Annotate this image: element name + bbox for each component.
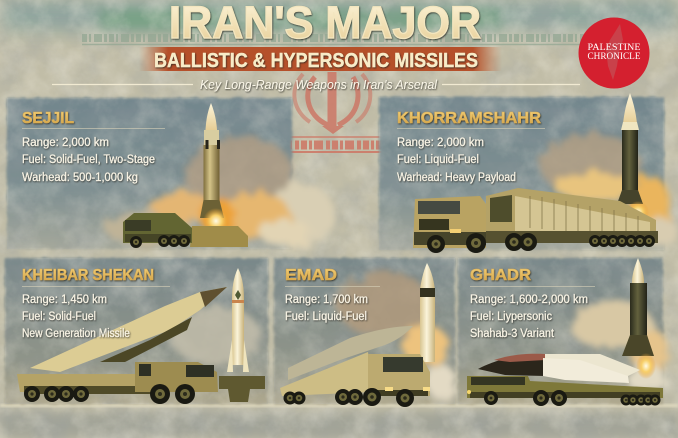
heading: EMAD xyxy=(285,267,337,284)
specs: Range: 2,000 km xyxy=(22,137,109,149)
specs: Fuel: Solid-Fuel xyxy=(22,311,96,323)
specs xyxy=(285,294,368,323)
panel: Khorramshahr xyxy=(379,93,678,253)
launcher truck xyxy=(413,188,658,253)
panel: Emad xyxy=(274,258,456,407)
logo: Palestine Chronicle: PALESTINE xyxy=(588,43,641,53)
specs: Range: 2,000 km xyxy=(397,137,484,149)
flag script band xyxy=(82,38,590,44)
launcher truck xyxy=(280,352,430,407)
heading: SEJJIL xyxy=(22,110,74,127)
specs: Shahab-3 Variant xyxy=(470,328,555,340)
specs: Warhead: 500-1,000 kg xyxy=(22,172,138,184)
specs: Warhead: Heavy Payload xyxy=(397,172,516,184)
specs: Range: 1,600-2,000 km xyxy=(470,294,588,306)
fire cloud xyxy=(540,133,678,246)
launcher truck xyxy=(123,213,248,248)
specs: Fuel: Liquid-Fuel xyxy=(285,311,367,323)
red flag script band xyxy=(270,137,395,152)
tagline: Key Long-Range Weapons in Iran's Arsenal xyxy=(200,78,438,92)
warheads on transporter xyxy=(478,354,640,383)
specs: Fuel: Solid-Fuel, Two-Stage xyxy=(22,154,155,166)
panel: Sejjil xyxy=(7,98,335,249)
missile xyxy=(617,93,643,204)
logo: Palestine Chronicle xyxy=(578,18,650,88)
heading: GHADR xyxy=(470,267,531,284)
launcher truck xyxy=(17,362,218,404)
specs: Fuel: Liquid-Fuel xyxy=(397,154,479,166)
specs: Range: 1,450 km xyxy=(22,294,107,306)
diagonal missile xyxy=(288,326,413,380)
smoke cloud xyxy=(105,137,335,247)
specs xyxy=(22,294,130,340)
smoke cloud xyxy=(337,273,456,400)
specs xyxy=(22,137,155,184)
smoke cloud xyxy=(170,305,260,365)
upright missile xyxy=(219,268,265,402)
heading: KHEIBAR SHEKAN xyxy=(22,267,154,284)
logo: Palestine Chronicle: CHRONICLE xyxy=(588,52,641,62)
missile xyxy=(622,258,654,356)
heading: KHORRAMSHAHR xyxy=(397,110,541,127)
specs: Range: 1,700 km xyxy=(285,294,368,306)
upright missile xyxy=(420,263,435,362)
diagonal missile xyxy=(30,287,227,372)
specs xyxy=(470,294,588,340)
panel: Ghadr xyxy=(458,258,668,406)
specs: New Generation Missile xyxy=(22,328,130,340)
missile xyxy=(200,103,224,218)
specs xyxy=(397,137,516,184)
launcher truck xyxy=(467,376,663,406)
panel: Kheibar Shekan xyxy=(5,258,268,404)
emblem: Iranian flag tulip xyxy=(294,72,370,134)
subtitle ribbon: BALLISTIC & HYPERSONIC MISSILES xyxy=(154,50,478,72)
smoke cloud xyxy=(570,301,668,392)
specs: Fuel: Liypersonic xyxy=(470,311,552,323)
